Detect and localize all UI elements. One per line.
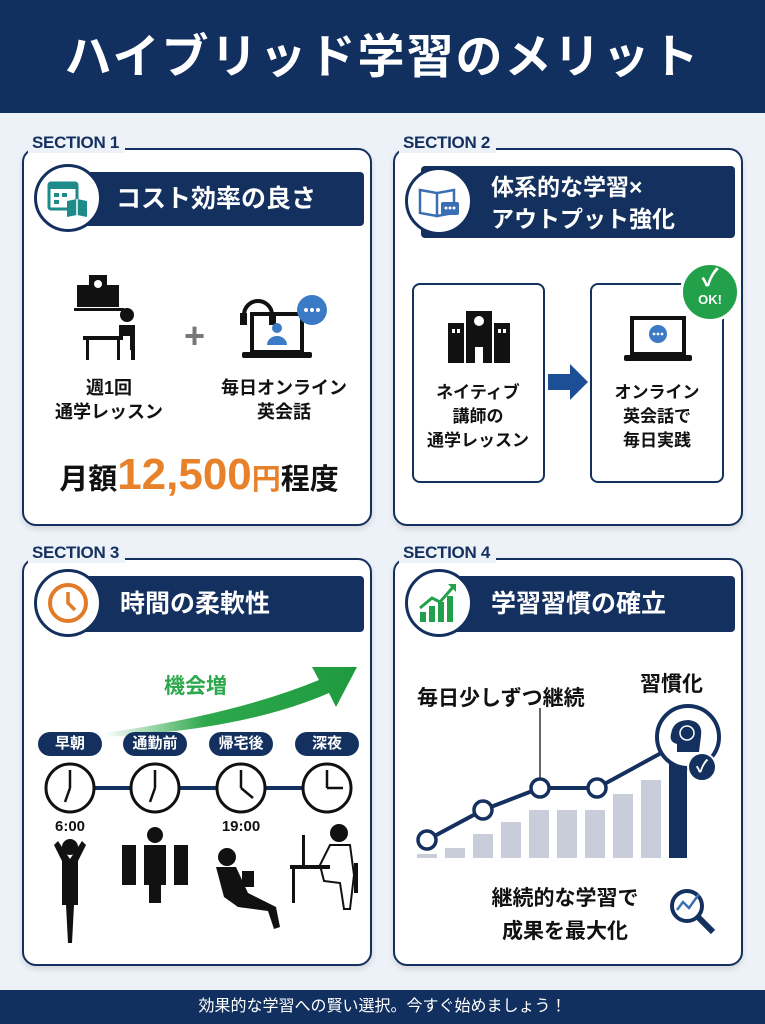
panel: section 3: 19:00 [222,818,260,835]
timeline line [70,786,330,790]
box: online daily: 英会話で [623,407,691,426]
header: habit: 学習習慣の確立 [491,590,666,618]
label: weekly [55,378,163,422]
header: time flexibility: 時間の柔軟性 [120,590,270,618]
header: systematic: アウトプット強化 [491,206,675,232]
text: daily little: 毎日少しずつ継続 [417,687,585,710]
arrow [548,364,588,400]
pills: 早朝 [55,735,85,752]
panel: section 2 [393,148,743,526]
icon: clock [34,569,102,637]
badge: OK: ✓ [701,265,719,292]
icon: check badge [687,752,717,782]
label: daily [221,378,347,422]
label: daily: 英会話 [257,402,311,422]
label: 機会増: 機会増 [164,675,227,698]
people silhouettes [54,824,358,943]
icon: magnifier [670,889,716,934]
icon: book chat [405,167,473,235]
panel: section 3: 通勤前 [132,735,178,752]
title bar [0,0,765,113]
box: native lessons: 講師の [452,407,504,426]
icon: calendar book [34,164,102,232]
icon: school lesson [74,275,135,360]
text: maximize results [492,886,638,943]
box: native lessons: 通学レッスン [427,431,529,450]
icon: growth chart [405,569,473,637]
section label 1: SECTION 1 [32,133,119,152]
text: habit: 習慣化 [640,673,703,696]
panel: section 1 [22,148,372,526]
pills [38,732,102,756]
text: maximize results: 継続的な学習で [492,887,638,910]
box: online daily [590,283,724,483]
header: cost: コスト効率の良さ [116,185,316,213]
badge: OK [680,262,740,322]
box: online daily: オンライン [614,383,700,402]
footer: 効果的な学習への賢い選択。今すぐ始めましょう！ [198,998,566,1015]
panel: section 3: 帰宅後 [218,735,264,752]
box: online daily: 毎日実践 [623,431,691,450]
icon: check badge: ✓ [696,757,708,776]
box: native lessons: ネイティブ [436,383,520,402]
header: systematic [421,166,735,238]
icon: brain habit [655,704,721,770]
header: systematic: 体系的な学習× [491,174,642,200]
times: 6:00 [55,818,85,835]
panel: section 3: 深夜 [312,735,342,752]
box: native lessons [412,283,545,483]
header: cost [50,172,364,226]
footer [0,990,765,1024]
text: maximize results: 成果を最大化 [502,920,628,943]
section label 4: SECTION 4 [403,543,490,562]
plus sign: + [184,315,205,356]
label: weekly: 週1回 [86,378,132,398]
label: daily: 毎日オンライン [221,378,347,398]
panel: section 3 [22,558,372,966]
label: weekly: 通学レッスン [55,402,163,422]
panel: section 4 [393,558,743,966]
section label 2: SECTION 2 [403,133,490,152]
header: habit [421,576,735,632]
section label 3: SECTION 3 [32,543,119,562]
arrow: more opportunities [108,667,357,736]
price: 月額12,500円程度 [59,450,339,499]
title bar: ハイブリッド学習のメリット [64,30,701,83]
icon: online laptop [240,295,327,358]
header: time flexibility [50,576,364,632]
chart: bars and line [416,708,687,858]
clocks [44,762,352,814]
badge: OK: OK! [698,292,722,307]
